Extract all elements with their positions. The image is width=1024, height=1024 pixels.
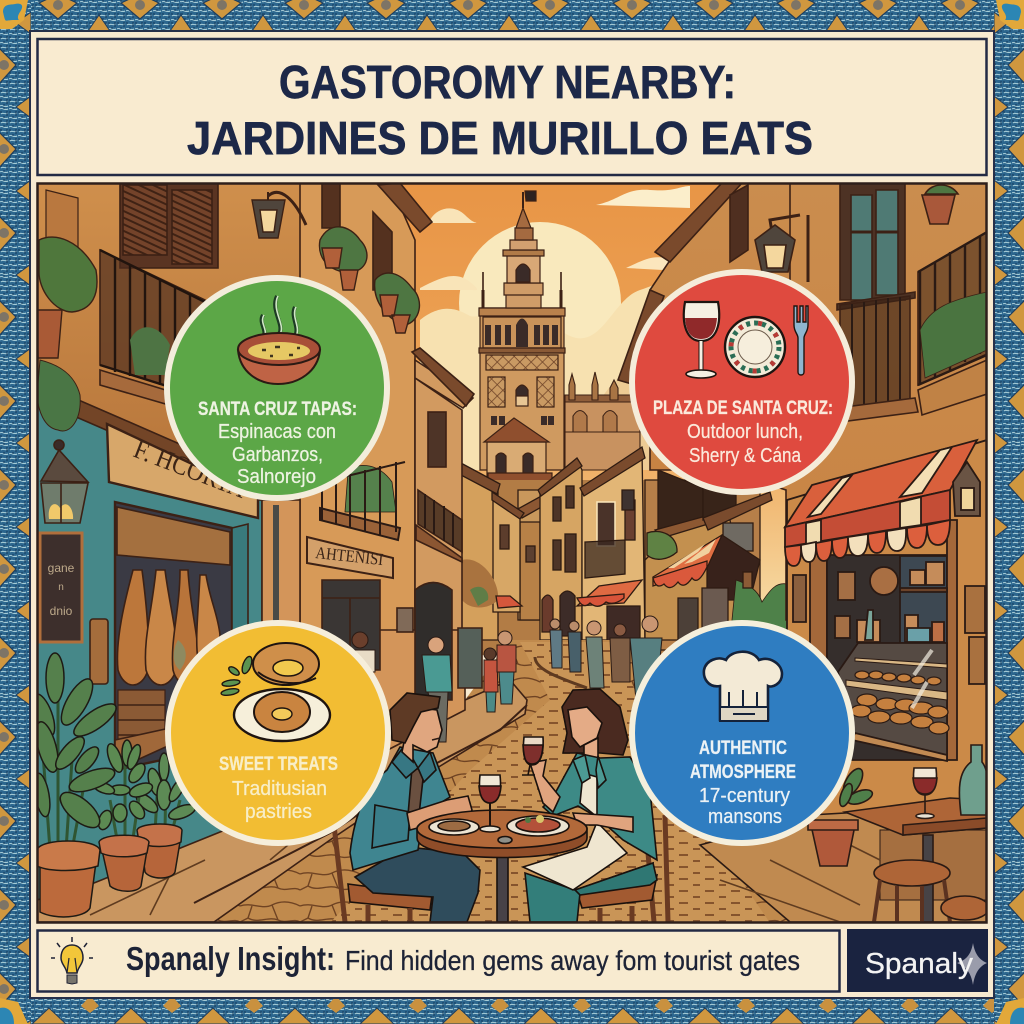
mid balcony <box>658 470 703 530</box>
right upper building <box>618 183 987 620</box>
insight text: Spanaly Insight: <box>126 940 335 977</box>
scene frame <box>38 184 986 922</box>
badge: Authentic Atmosphere <box>632 623 852 843</box>
badge text: PLAZA DE SANTA CRUZ: <box>653 397 833 419</box>
middle upper building <box>300 183 474 640</box>
badge: Sweet Treats <box>168 623 388 843</box>
title text <box>187 56 813 164</box>
badge text <box>690 737 796 828</box>
badge text: Garbanzos, <box>232 444 323 466</box>
badge text: Outdoor lunch, <box>687 421 803 443</box>
domed chapel <box>484 418 552 490</box>
shop window with hams <box>115 502 248 770</box>
icon: fork <box>794 306 808 375</box>
street lantern <box>41 440 88 523</box>
shop sign: F. HCORTA <box>130 434 251 504</box>
plant one <box>38 652 117 918</box>
right table wine glass <box>913 768 937 818</box>
hanging plant pots left <box>37 192 419 358</box>
background pedestrians <box>352 616 662 742</box>
chairs <box>334 815 668 922</box>
sky and sun <box>296 184 786 601</box>
badge text: AUTHENTIC <box>699 737 787 759</box>
vine above lantern <box>37 360 80 431</box>
insight bar <box>38 930 840 992</box>
badge text <box>219 753 338 823</box>
icon: bowl with steam <box>238 296 320 384</box>
badge text: mansons <box>708 806 782 828</box>
teal shop front left <box>37 360 262 900</box>
potted plants bottom left <box>29 653 197 917</box>
table wine glass <box>479 775 501 832</box>
title text: GASTOROMY NEARBY: <box>279 56 736 108</box>
badge: Plaza de Santa Cruz <box>632 272 852 492</box>
chalkboard: gane <box>48 561 75 575</box>
badge text: SANTA CRUZ TAPAS: <box>198 398 357 420</box>
icon: pastry on top <box>253 643 319 685</box>
badge text <box>653 397 833 467</box>
plant two <box>92 740 154 891</box>
icon: plated pastry <box>234 689 330 741</box>
badge text: Salnorejo <box>237 466 316 488</box>
chalkboard <box>40 533 82 642</box>
badge text: ATMOSPHERE <box>690 761 796 783</box>
raised wine glass <box>522 737 543 775</box>
left curb sidewalk <box>37 680 527 922</box>
chalkboard: n <box>58 582 64 593</box>
icon: plate <box>725 317 785 377</box>
logo box <box>847 929 988 992</box>
sparkle <box>957 943 987 985</box>
ground: street and cobbles <box>38 640 788 922</box>
badge text: Espinacas con <box>218 421 336 443</box>
shop sign <box>107 424 258 518</box>
badge text: SWEET TREATS <box>219 753 338 775</box>
woman <box>522 689 657 922</box>
left upper building <box>38 184 300 442</box>
Giralda tower <box>479 191 565 470</box>
cathedral <box>565 372 640 470</box>
pastry display case <box>838 643 949 761</box>
icon: wine glass <box>684 302 719 378</box>
authentic sign <box>307 537 393 578</box>
icon: light bulb <box>51 937 93 984</box>
icon: chef hat <box>704 652 782 721</box>
mid-distance street buildings <box>455 447 787 660</box>
right foreground sidewalk, plant, table <box>700 745 989 922</box>
left building lower wall with sign <box>261 499 483 750</box>
badge text: pastries <box>245 801 312 823</box>
plant three <box>133 753 197 878</box>
dining couple at table <box>334 689 668 922</box>
man <box>350 693 480 922</box>
insight bar: Find hidden gems away fom tourist gates <box>345 945 800 976</box>
logo box: Spanaly <box>865 948 974 980</box>
title text: JARDINES DE MURILLO EATS <box>187 112 813 164</box>
balcony and plant over sign <box>320 462 405 540</box>
badge text <box>198 398 357 488</box>
authentic sign: AHTENISI <box>315 543 384 569</box>
street scene illustration <box>29 183 989 923</box>
chalkboard: dnio <box>50 604 73 618</box>
bottle <box>959 745 988 815</box>
badge text: Traditusian <box>232 778 327 800</box>
title panel <box>38 39 986 175</box>
right street awning <box>653 535 760 600</box>
badge: Santa Cruz Tapas <box>167 278 387 498</box>
table <box>417 775 587 922</box>
badge text: 17-century <box>699 785 790 807</box>
icon: leaves <box>221 655 254 697</box>
striped awning <box>785 440 977 566</box>
right shop front with awning and pastry case <box>785 440 987 820</box>
badge text: Sherry & Cána <box>689 445 802 467</box>
